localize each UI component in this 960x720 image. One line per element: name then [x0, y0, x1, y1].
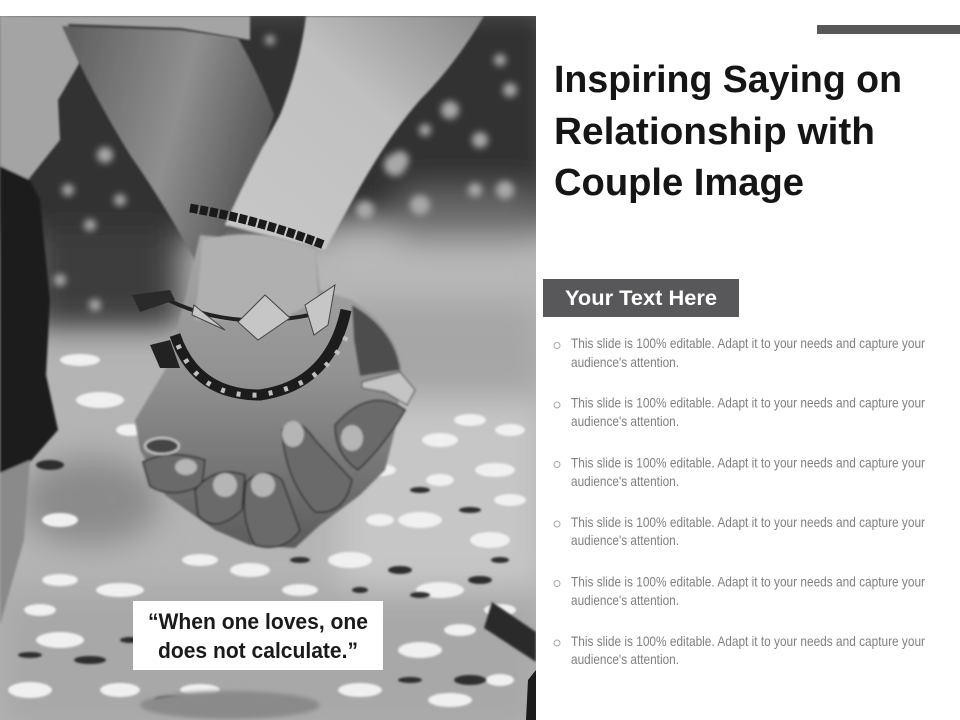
bullet item 6 — [554, 633, 925, 667]
bullet list — [554, 335, 925, 667]
bullet item 1 — [554, 335, 925, 370]
bullet item 5 — [554, 574, 925, 608]
bracelets — [132, 208, 347, 395]
fingers — [143, 400, 405, 547]
bullet item 6: audience's attention. — [571, 651, 679, 667]
person left: shirt and shorts — [0, 16, 250, 625]
title: Couple Image — [554, 162, 804, 204]
bullet item 2: audience's attention. — [571, 413, 679, 429]
quote text — [148, 609, 368, 663]
title: Relationship with — [554, 111, 875, 153]
clasped hands — [135, 234, 415, 548]
quote box — [133, 601, 383, 670]
bullet item 1: audience's attention. — [571, 354, 679, 370]
bullet item 4 — [554, 514, 925, 548]
photo: couple holding hands — [0, 0, 560, 720]
decorative top-right bar — [817, 25, 960, 34]
ring left — [145, 438, 179, 454]
quote text: does not calculate.” — [158, 638, 358, 663]
bullet item 4: audience's attention. — [571, 532, 679, 548]
quote text: “When one loves, one — [148, 609, 368, 634]
bullet item 3 — [554, 454, 925, 489]
title — [554, 59, 902, 204]
subheading: Your Text Here: Your Text Here — [565, 287, 717, 310]
bullet item 5: audience's attention. — [571, 592, 679, 608]
bullet item 2 — [554, 394, 925, 429]
photo background: foliage and ground — [0, 0, 560, 720]
fingernails — [175, 421, 363, 497]
ring right — [362, 372, 415, 405]
subheading: Your Text Here — [543, 279, 739, 317]
arms — [62, 16, 484, 262]
title: Inspiring Saying on — [554, 59, 902, 101]
bullet item 3: audience's attention. — [571, 473, 679, 489]
